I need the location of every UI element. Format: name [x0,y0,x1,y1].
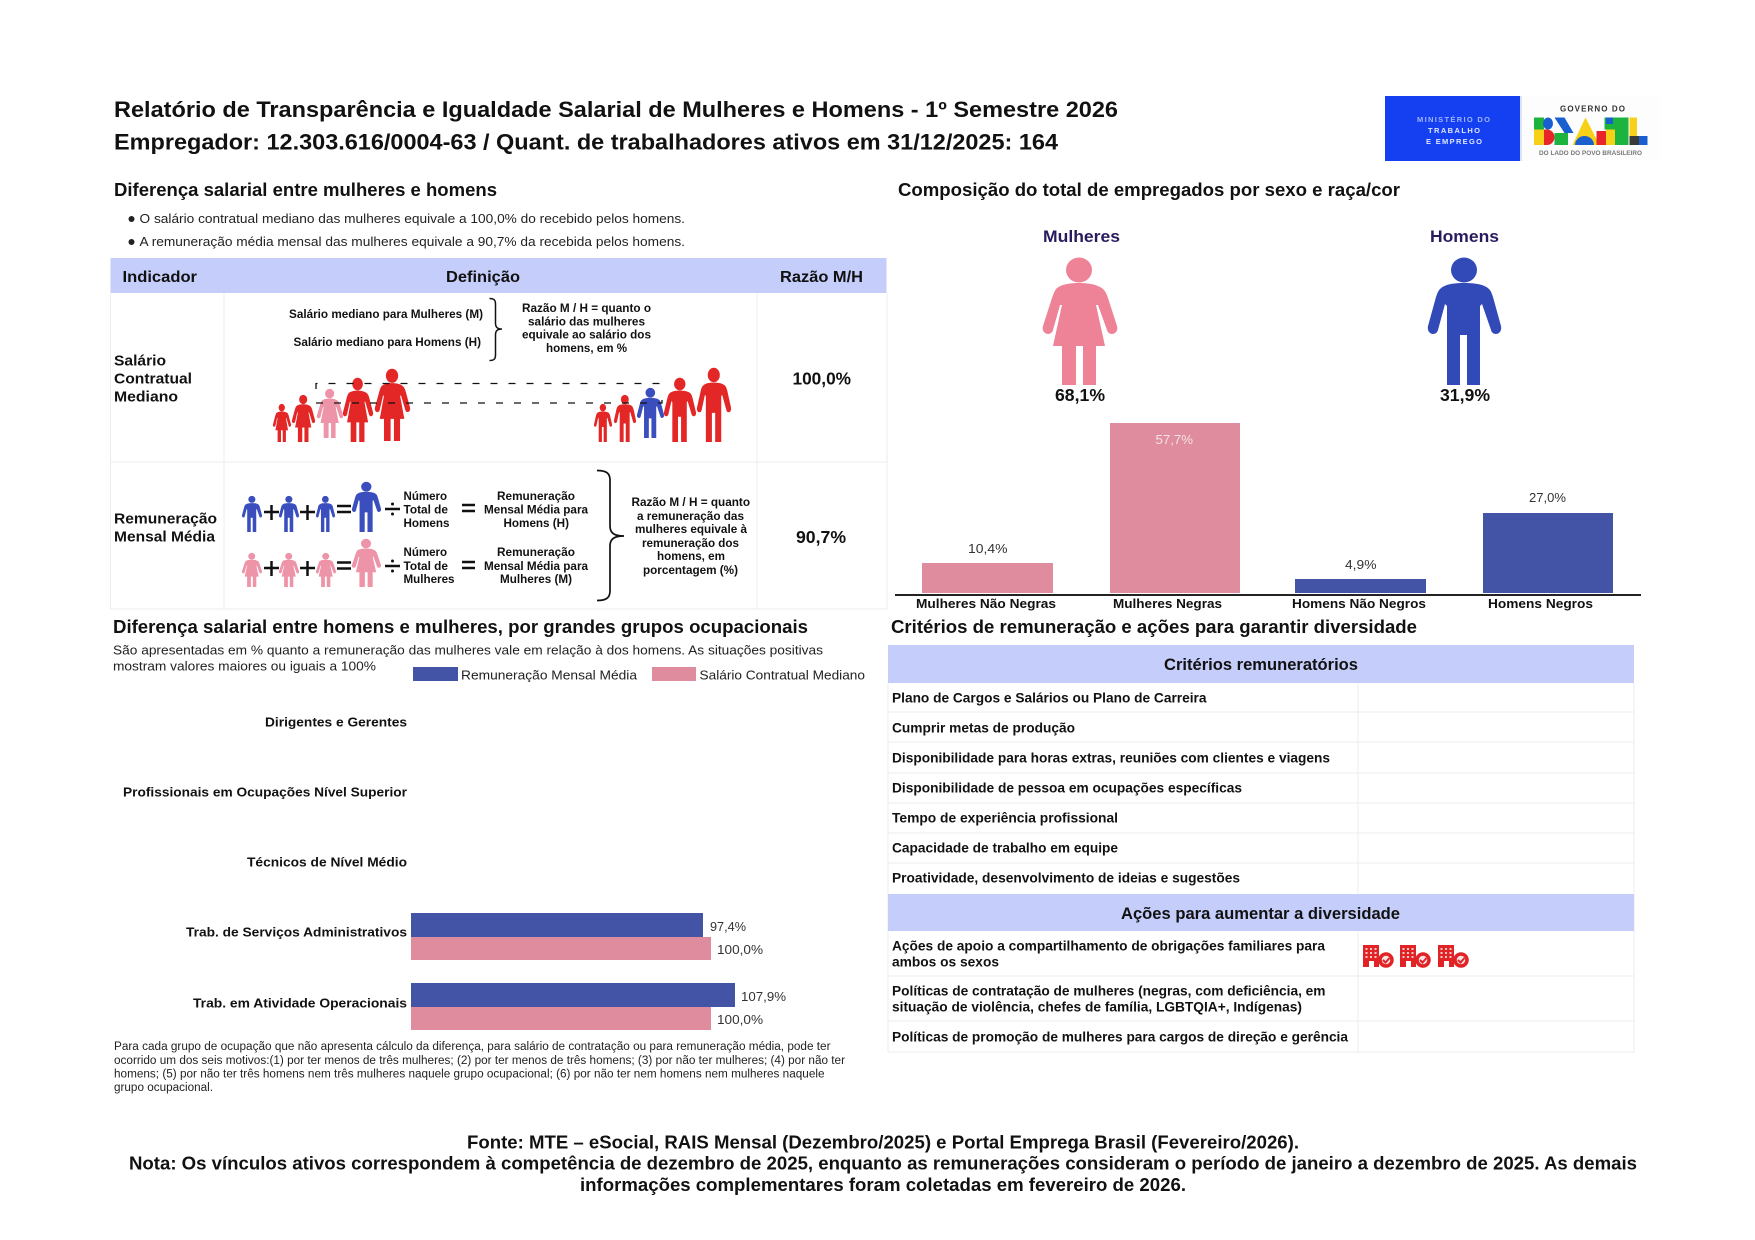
panel: mulheres pictogram [1043,227,1120,405]
legend: Salário Contratual Mediano [700,668,865,682]
bar chart: grupos ocupacionais: Trab. em Atividade Operacionais [193,996,407,1010]
bar chart: grupos ocupacionais: Profissionais em Ocupações Nível Superior [123,784,407,800]
bar chart: composição por sexo e raça/cor [895,423,1641,611]
definition: razão M/H remuneração: Razão M / H = quanto [632,497,750,509]
panel: critérios remuneratórios table: Capacidade de trabalho em equipe [892,840,1118,856]
definition: razão M/H remuneração: homens, em [657,551,725,563]
row label: salário contratual mediano: Salário [114,352,166,370]
people illustration: homens [594,368,731,442]
legend: Remuneração Mensal Média [461,668,638,682]
definition: salário mediano labels: Salário mediano para Homens (H) [294,337,481,349]
definition: razão M/H salário [522,303,651,355]
bar chart: composição por sexo e raça/cor: Homens Não Negros [1292,596,1426,611]
bar chart: grupos ocupacionais: 97,4% [710,919,746,934]
bar chart: composição por sexo e raça/cor: Homens Negros [1488,596,1593,611]
formula: homens: Homens (H) [504,518,569,530]
bar chart: grupos ocupacionais: Técnicos de Nível Médio [247,854,407,870]
footnote [114,1041,845,1094]
panel: critérios remuneratórios table: Políticas de contratação de mulheres (negras, com deficiência, em [892,984,1326,998]
row label: salário contratual mediano: Contratual [114,370,192,388]
panel: critérios remuneratórios table: Disponibilidade de pessoa em ocupações específicas [892,780,1242,796]
people illustration: mulheres [273,369,410,442]
definition: salário mediano labels: Salário mediano para Mulheres (M) [289,309,483,321]
panel: homens pictogram: Homens [1430,227,1499,246]
heading: composição: Composição do total de empregados por sexo e raça/cor [898,180,1400,200]
definition: razão M/H remuneração: a remuneração das [637,511,744,523]
bar chart: composição por sexo e raça/cor: 10,4% [968,541,1008,556]
definition: razão M/H remuneração: mulheres equivale à [635,524,748,536]
formula: homens: Mensal Média para [484,504,589,516]
formula: mulheres: Remuneração [497,547,575,559]
header: ações para aumentar a diversidade: Ações para aumentar a diversidade [1121,905,1400,923]
formula: mulheres: Número [404,547,447,559]
definition: salário mediano labels [289,309,483,349]
legend [413,667,865,682]
definition: razão M/H remuneração [632,497,750,577]
panel: tabela de indicadores [110,258,887,609]
panel: critérios remuneratórios table [888,645,1634,1052]
panel: critérios remuneratórios table: ambos os sexos [892,954,999,970]
large brace [597,470,624,600]
footnote: Para cada grupo de ocupação que não apresenta cálculo da diferença, para salário de contratação ou para remuneração média, pode ter [114,1041,831,1053]
source and note [129,1132,1637,1195]
panel: critérios remuneratórios table: Disponibilidade para horas extras, reuniões com clientes e viagens [892,750,1330,766]
bar chart: composição por sexo e raça/cor: Mulheres Não Negras [916,596,1056,611]
definition: razão M/H salário: homens, em % [546,343,627,355]
panel: homens pictogram [1428,227,1501,405]
row label: remuneração mensal média: Mensal Média [114,528,216,546]
bar chart: grupos ocupacionais: 107,9% [741,989,786,1004]
footnote: homens; (5) por não ter três homens nem três mulheres naquele grupo ocupacional; (6) por não ter nem homens nem mulheres naquele [114,1068,824,1080]
description: São apresentadas em % quanto a remuneração das mulheres vale em relação à dos homens. As situações positivas [113,642,824,658]
bar chart: composição por sexo e raça/cor: Mulheres Negras [1113,596,1222,611]
row label: salário contratual mediano: Mediano [114,388,178,406]
row label: remuneração mensal média: Remuneração [114,510,217,528]
logo: Governo do Brasil: GOVERNO DO [1560,104,1625,114]
panel: critérios remuneratórios table: Plano de Cargos e Salários ou Plano de Carreira [892,690,1207,706]
bar chart: grupos ocupacionais: 100,0% [717,942,763,957]
report title [114,97,1118,154]
description: mostram valores maiores ou iguais a 100% [113,658,376,674]
report title: Empregador: 12.303.616/0004-63 / Quant. de trabalhadores ativos em 31/12/2025: 164 [114,130,1059,154]
value: 100,0%: 100,0% [792,368,851,388]
formula: mulheres: Total de [404,561,448,573]
icons: empresas com a ação [1363,945,1467,967]
logo: Governo do Brasil [1520,96,1660,161]
bar chart: composição por sexo e raça/cor: 27,0% [1529,490,1566,505]
panel: critérios remuneratórios table: Tempo de experiência profissional [892,810,1118,826]
definition: razão M/H remuneração: remuneração dos [642,538,739,550]
bar chart: grupos ocupacionais [123,714,786,1030]
definition: razão M/H salário: equivale ao salário dos [522,330,651,342]
bar chart: composição por sexo e raça/cor: 57,7% [1156,432,1193,447]
panel: critérios remuneratórios table: situação de violência, chefes de família, LGBTQIA+, Indígenas) [892,1000,1302,1014]
formula: mulheres: Mulheres (M) [500,574,572,586]
formula: homens: Total de [404,504,448,516]
definition: razão M/H remuneração: porcentagem (%) [643,565,738,577]
source and note: Fonte: MTE – eSocial, RAIS Mensal (Dezembro/2025) e Portal Emprega Brasil (Fevereiro/2026). [467,1132,1299,1152]
value: 90,7%: 90,7% [796,527,846,547]
panel: homens pictogram: 31,9% [1440,385,1490,405]
table header: Definição [446,269,520,286]
summary bullets [128,211,685,249]
panel: mulheres pictogram: Mulheres [1043,227,1120,246]
panel: critérios remuneratórios table: Cumprir metas de produção [892,720,1075,736]
logo: Ministério do Trabalho e Emprego: E EMPREGO [1426,137,1482,146]
logo: Ministério do Trabalho e Emprego: MINISTÉRIO DO [1417,115,1490,124]
panel: mulheres pictogram: 68,1% [1055,385,1105,405]
panel: critérios remuneratórios table: Políticas de promoção de mulheres para cargos de direção e gerência [892,1030,1348,1044]
logo: Ministério do Trabalho e Emprego [1385,96,1520,161]
definition: razão M/H salário: salário das mulheres [528,316,645,328]
row label: salário contratual mediano [114,352,192,406]
logo: Ministério do Trabalho e Emprego: TRABALHO [1428,126,1480,135]
bar chart: composição por sexo e raça/cor: 4,9% [1345,557,1377,572]
formula: homens: Homens [404,518,450,530]
bar chart: grupos ocupacionais: Dirigentes e Gerentes [265,714,407,730]
header: critérios remuneratórios: Critérios remuneratórios [1164,656,1358,674]
source and note: informações complementares foram coletadas em fevereiro de 2026. [580,1175,1186,1195]
dashed median lines [316,384,662,403]
bar chart: grupos ocupacionais: Trab. de Serviços Administrativos [186,924,407,940]
summary bullets: A remuneração média mensal das mulheres equivale a 90,7% da recebida pelos homens. [140,234,685,249]
description [113,642,824,674]
header: critérios remuneratórios [888,645,1634,683]
footnote: grupo ocupacional. [114,1082,213,1094]
formula: homens [242,482,589,532]
source and note: Nota: Os vínculos ativos correspondem à competência de dezembro de 2025, enquanto as remunerações consideram o período de janeiro a dezembro de 2025. As demais [129,1154,1637,1174]
table header: Razão M/H [780,269,863,286]
formula: mulheres: Mulheres [404,574,454,586]
panel: critérios remuneratórios table: Ações de apoio a compartilhamento de obrigações familiares para [892,938,1325,954]
formula: homens: Remuneração [497,491,575,503]
panel: critérios remuneratórios table: Proatividade, desenvolvimento de ideias e sugestões [892,870,1240,886]
formula: homens: Número [404,491,447,503]
table header: Indicador [122,269,197,286]
definition: razão M/H salário: Razão M / H = quanto o [522,303,651,315]
logo: Governo do Brasil: DO LADO DO POVO BRASILEIRO [1539,150,1642,157]
header: ações para aumentar a diversidade [888,894,1634,931]
bar chart: grupos ocupacionais: 100,0% [717,1012,763,1027]
footnote: ocorrido um dos seis motivos:(1) por ter menos de três mulheres; (2) por ter menos de três homens; (3) por não ter mulheres; (4) por não ter [114,1055,845,1067]
heading: grupos ocupacionais: Diferença salarial entre homens e mulheres, por grandes grupos ocupacionais [113,617,808,637]
heading: critérios: Critérios de remuneração e ações para garantir diversidade [891,617,1417,637]
table header [110,258,886,293]
formula: mulheres [242,539,589,587]
brace [490,298,502,360]
row label: remuneração mensal média [114,510,217,546]
summary bullets: O salário contratual mediano das mulheres equivale a 100,0% do recebido pelos homens. [140,211,685,226]
report title: Relatório de Transparência e Igualdade Salarial de Mulheres e Homens - 1º Semestre 2026 [114,97,1118,122]
formula: mulheres: Mensal Média para [484,561,589,573]
heading: diferença salarial: Diferença salarial entre mulheres e homens [114,180,497,200]
